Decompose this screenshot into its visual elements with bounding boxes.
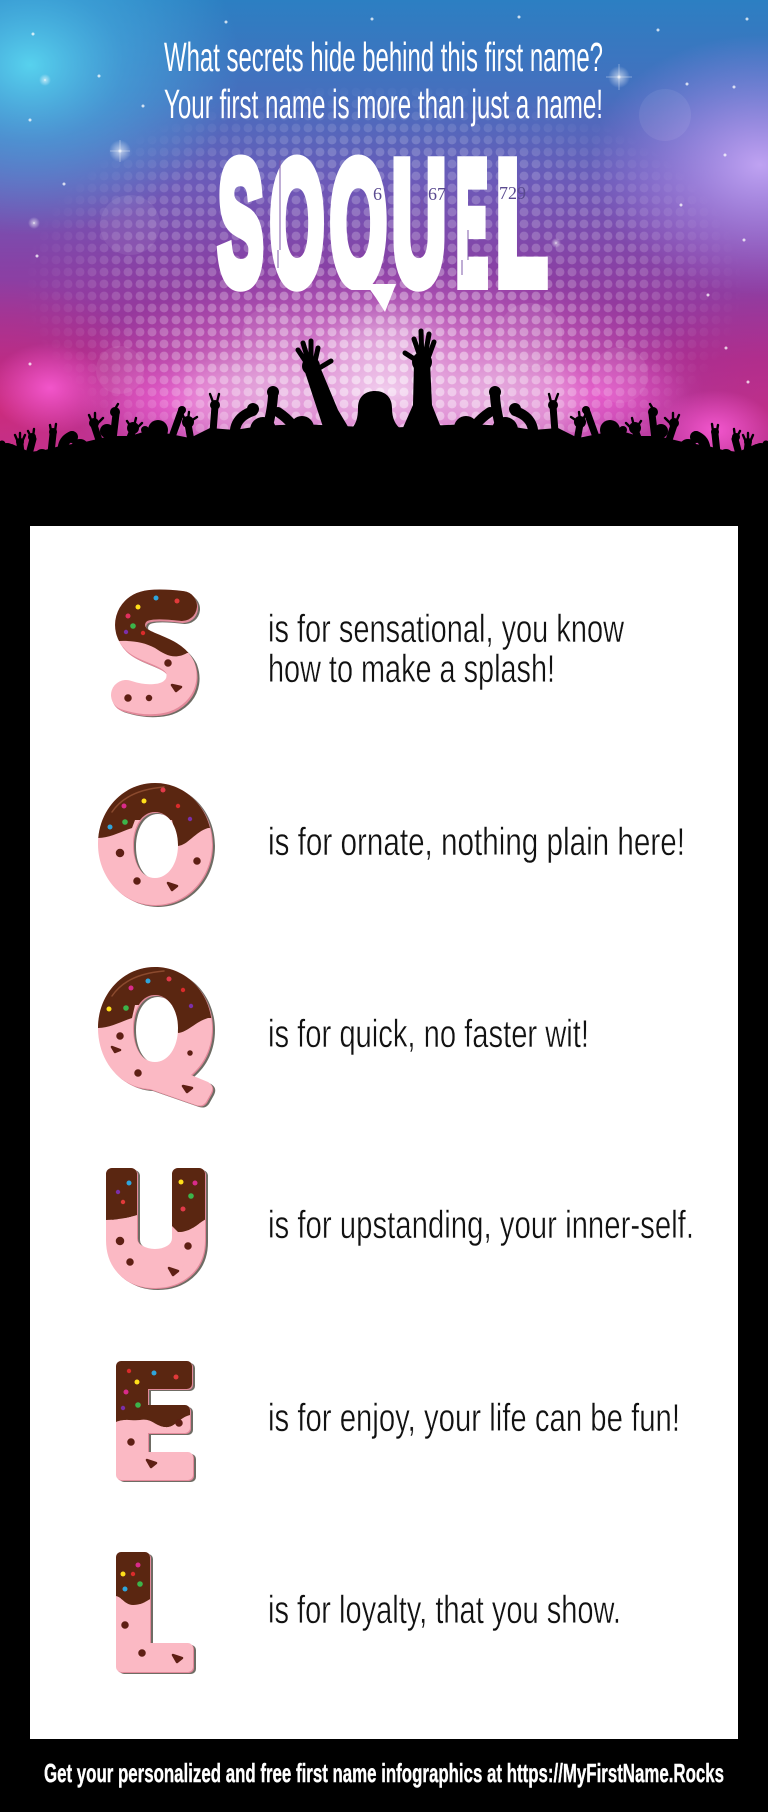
letter icon: E — [121, 1366, 191, 1477]
title: name SOQUEL: 67 — [428, 184, 446, 204]
title: name SOQUEL: E — [456, 126, 488, 321]
text: Q line: is for quick, no faster wit! — [268, 1013, 589, 1056]
letter icon: L — [120, 1557, 191, 1669]
text: S line: is for sensational, you know — [268, 608, 624, 651]
title: name SOQUEL: L — [496, 125, 547, 320]
title: name SOQUEL: 6 — [373, 184, 382, 204]
title: name SOQUEL: S — [218, 125, 263, 320]
background: concert stage header — [0, 0, 768, 452]
title: name SOQUEL: U — [392, 127, 446, 321]
text: S line: how to make a splash! — [268, 648, 555, 691]
text: S line — [268, 608, 624, 691]
letter icon: Q — [98, 967, 215, 1108]
letter icon: U — [112, 1174, 202, 1284]
panel: white letters card — [30, 526, 738, 1739]
letter icon: S — [124, 596, 185, 702]
letter icon: O — [98, 783, 215, 907]
title: intro lines — [164, 34, 603, 127]
text: L line: is for loyalty, that you show. — [268, 1589, 621, 1632]
central figure with raised hands — [290, 331, 470, 482]
title: name SOQUEL: Q — [330, 127, 387, 321]
title: name SOQUEL: 729 — [499, 183, 526, 203]
crowd silhouette — [0, 331, 768, 526]
title: name SOQUEL — [216, 154, 548, 312]
title: name SOQUEL: O — [270, 127, 324, 321]
